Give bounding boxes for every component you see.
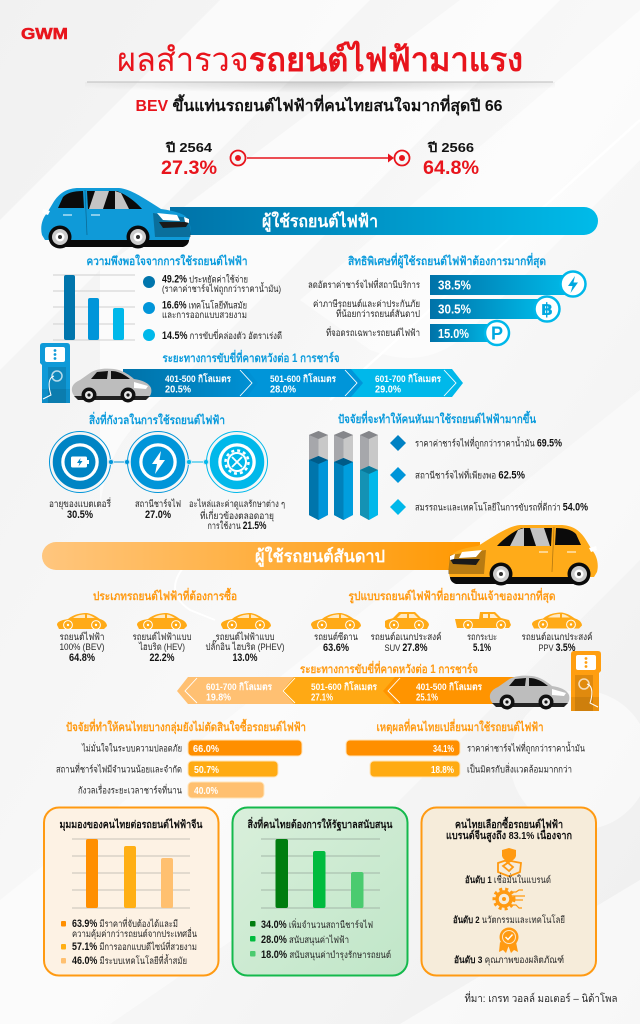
- legend: [250, 918, 391, 961]
- icon: parking: P: [491, 324, 503, 344]
- heading: desired body style: รูปแบบรถยนต์ไฟฟ้าที่อยากเป็นเจ้าของมากที่สุด: [348, 587, 556, 604]
- range arrows (blue): [123, 369, 463, 397]
- rank 2: อันดับ 2 นวัตกรรมและเทคโนโลยี: [453, 914, 565, 926]
- panel: government support: [232, 808, 408, 976]
- legend: satisfaction: 14.5% การขับขี่คล่องตัว อัตราเร่งดี: [162, 329, 282, 342]
- illustration: gray car: [72, 369, 151, 402]
- legend: 18.0% สนับสนุนค่าบำรุงรักษารถยนต์: [261, 949, 391, 961]
- bar chart: hesitation: [56, 740, 302, 798]
- item: BEV: 100% (BEV): [60, 642, 104, 653]
- legend: factors: ราคาค่าชาร์จไฟที่ถูกกว่าราคาน้ำมัน 69.5%: [415, 436, 562, 450]
- legend: satisfaction: (ราคาค่าชาร์จไฟถูกกว่าราคาน้ำมัน): [162, 282, 281, 295]
- privilege labels: ค่าภาษีรถยนต์และค่าประกันภัย: [313, 298, 420, 310]
- item: sedan: รถยนต์ซีดาน: [314, 631, 358, 643]
- item: SUV: รถยนต์อเนกประสงค์: [370, 631, 442, 643]
- item: BEV: 64.8%: [69, 652, 95, 664]
- privilege labels: ลดอัตราค่าชาร์จไฟที่สถานีบริการ: [308, 278, 420, 291]
- item: HEV: [132, 613, 192, 664]
- range arrows (orange): 27.1%: [311, 692, 333, 704]
- bar chart: hesitation: สถานที่ชาร์จไฟมีจำนวนน้อยและจำกัด: [56, 762, 182, 776]
- legend: 46.0% มีระบบเทคโนโลยีที่ล้ำสมัย: [72, 954, 187, 967]
- panel heading: มุมมองของคนไทยต่อรถยนต์ไฟฟ้าจีน: [60, 818, 203, 832]
- icon: medal: [499, 928, 518, 953]
- bar chart: [72, 839, 190, 908]
- source: ที่มา: เกรท วอลล์ มอเตอร์ – นิด้าโพล: [464, 991, 618, 1005]
- range arrows (orange): 601-700 กิโลเมตร: [206, 681, 273, 693]
- heading: range (orange): ระยะทางการขับขี่ที่คาดหวังต่อ 1 การชาร์จ: [300, 660, 478, 676]
- bar chart: [261, 839, 380, 908]
- item: BEV: รถยนต์ไฟฟ้า: [60, 631, 104, 643]
- legend: 28.0% สนับสนุนค่าไฟฟ้า: [261, 934, 349, 946]
- legend: 34.0% เพิ่มจำนวนสถานีชาร์จไฟ: [261, 918, 373, 931]
- heading: concerns: สิ่งที่กังวลในการใช้รถยนต์ไฟฟ้า: [89, 411, 225, 427]
- icon: parking: [485, 321, 509, 345]
- range arrows (blue): 601-700 กิโลเมตร: [375, 373, 442, 385]
- legend: satisfaction: 49.2% ประหยัดค่าใช้จ่าย: [162, 274, 248, 286]
- item: BEV: [57, 613, 107, 664]
- privilege labels: [308, 278, 420, 339]
- bar chart: hesitation: ไม่มั่นใจในระบบความปลอดภัย: [81, 742, 182, 754]
- item: PPV: PPV 3.5%: [538, 642, 576, 654]
- privilege labels: ที่น้อยกว่ารถยนต์สันดาป: [336, 307, 420, 320]
- icon: handshake: [498, 848, 521, 876]
- item: PPV: รถยนต์อเนกประสงค์: [522, 631, 592, 643]
- concern: charging station: สถานีชาร์จไฟ: [135, 498, 181, 510]
- range arrows (orange): 19.8%: [206, 692, 231, 704]
- second heading line: แบรนด์จีนสูงถึง 83.1% เนื่องจาก: [446, 827, 572, 843]
- heading: factors: ปัจจัยที่จะทำให้คนหันมาใช้รถยนต์ไฟฟ้ามากขึ้น: [338, 410, 536, 426]
- connector: [186, 460, 208, 464]
- connector: [108, 460, 130, 464]
- range arrows (blue): 501-600 กิโลเมตร: [270, 373, 337, 385]
- illustration: orange charger: [571, 651, 601, 711]
- bar chart: privileges: [430, 275, 573, 342]
- bar chart: reasons to switch: 18.8%: [431, 764, 455, 776]
- arrow: 2564 to 2566: [230, 150, 410, 166]
- bar chart: reasons to switch: 34.1%: [433, 743, 454, 755]
- bar chart: privileges: 38.5%: [438, 278, 471, 292]
- section banner: EV users: ผู้ใช้รถยนต์ไฟฟ้า: [262, 211, 378, 233]
- stat: 2566: [423, 141, 479, 179]
- illustration: gray car 2: [490, 676, 569, 710]
- item: HEV: รถยนต์ไฟฟ้าแบบ: [132, 631, 192, 643]
- legend: 63.9% มีราคาที่จับต้องได้และมี: [72, 917, 178, 930]
- rank 1: อันดับ 1 เชื่อมั่นในแบรนด์: [465, 873, 551, 886]
- 3D bar chart: factors: [309, 431, 378, 520]
- bar chart: reasons to switch: เป็นมิตรกับสิ่งแวดล้อมมากกว่า: [467, 762, 572, 776]
- range arrows (blue): 28.0%: [270, 384, 296, 396]
- bar chart: hesitation: 40.0%: [194, 785, 219, 797]
- legend: factors: [390, 435, 588, 515]
- heading: EV types: ประเภทรถยนต์ไฟฟ้าที่ต้องการซื้อ: [93, 587, 237, 603]
- item: sedan: 63.6%: [323, 642, 349, 654]
- legend: satisfaction: และการออกแบบสวยงาม: [162, 310, 247, 321]
- item: PHEV: [206, 613, 284, 664]
- concern: battery: 30.5%: [67, 509, 93, 521]
- section banner: ICE users: ผู้ใช้รถยนต์สันดาป: [255, 546, 385, 568]
- legend: satisfaction: 16.6% เทคโนโลยีทันสมัย: [162, 300, 247, 312]
- heading: privileges: สิทธิพิเศษที่ผู้ใช้รถยนต์ไฟฟ้าต้องการมากที่สุด: [348, 252, 546, 269]
- range arrows (blue): 29.0%: [375, 384, 401, 396]
- concern: charging station: [128, 432, 188, 521]
- icon: lightning: [560, 272, 586, 296]
- range arrows (orange): 401-500 กิโลเมตร: [416, 681, 483, 693]
- icon: baht: [534, 296, 560, 322]
- subtitle: BEV ขึ้นแท่นรถยนต์ไฟฟ้าที่คนไทยสนใจมากที่สุดปี 66: [136, 94, 503, 116]
- range arrows (blue): 20.5%: [165, 384, 191, 396]
- item: sedan: [311, 613, 361, 654]
- item: pickup: [455, 612, 511, 654]
- illustration: orange car: [448, 525, 598, 586]
- legend: satisfaction: [143, 274, 282, 342]
- bar chart: hesitation: 50.7%: [194, 764, 220, 776]
- bar chart: hesitation: 66.0%: [193, 743, 220, 755]
- bar chart: reasons to switch: [346, 740, 585, 777]
- range arrows (blue): 401-500 กิโลเมตร: [165, 373, 232, 385]
- title: ผลสำรวจรถยนต์ไฟฟ้ามาแรง: [117, 40, 523, 78]
- section banner: EV users: [170, 207, 598, 235]
- rank 3: อันดับ 3 คุณภาพของผลิตภัณฑ์: [454, 954, 564, 966]
- heading: satisfaction: ความพึงพอใจจากการใช้รถยนต์ไฟฟ้า: [86, 254, 248, 268]
- bar chart: satisfaction: [53, 275, 135, 340]
- legend: factors: สมรรถนะและเทคโนโลยีในการขับรถที่ดีกว่า 54.0%: [415, 500, 588, 514]
- item: PHEV: 13.0%: [232, 652, 258, 664]
- item: PHEV: ปลั๊กอิน ไฮบริด (PHEV): [206, 639, 284, 653]
- concern: maintenance: การใช้งาน 21.5%: [208, 520, 267, 532]
- range arrows (orange): [177, 677, 525, 704]
- concern: maintenance: ที่เกี่ยวข้องตลอดอายุ: [200, 509, 274, 522]
- stat: 2564: 27.3%: [161, 158, 217, 179]
- item: HEV: ไฮบริด (HEV): [138, 641, 185, 653]
- icon: baht: ฿: [541, 300, 553, 319]
- heading: hesitation: ปัจจัยที่ทำให้คนไทยบางกลุ่มยังไม่ตัดสินใจซื้อรถยนต์ไฟฟ้า: [66, 718, 306, 735]
- heading: reasons to switch: เหตุผลที่คนไทยเปลี่ยนมาใช้รถยนต์ไฟฟ้า: [376, 718, 544, 735]
- logo: GWM: GWM: [21, 26, 68, 43]
- item: PHEV: รถยนต์ไฟฟ้าแบบ: [216, 631, 274, 643]
- stat: 2566: 64.8%: [423, 158, 479, 179]
- item: pickup: รถกระบะ: [467, 632, 497, 643]
- stat: 2566: ปี 2566: [426, 141, 474, 155]
- concern: charging station: 27.0%: [145, 509, 171, 521]
- section banner: ICE users: [42, 542, 480, 570]
- legend: factors: สถานีชาร์จไฟที่เพียงพอ 62.5%: [415, 468, 525, 482]
- panel heading: คนไทยเลือกซื้อรถยนต์ไฟฟ้า: [455, 816, 563, 831]
- stat: 2564: ปี 2564: [164, 141, 212, 155]
- bar chart: hesitation: กังวลเรื่องระยะเวลาชาร์จที่นาน: [78, 784, 182, 796]
- item: pickup: 5.1%: [473, 642, 491, 654]
- privilege labels: ที่จอดรถเฉพาะรถยนต์ไฟฟ้า: [326, 326, 420, 339]
- bar chart: privileges: 15.0%: [438, 327, 469, 341]
- concern: maintenance: [189, 432, 285, 532]
- bar chart: privileges: 30.5%: [438, 302, 471, 316]
- concern: maintenance: อะไหล่และค่าดูแลรักษาต่าง ๆ: [189, 498, 285, 510]
- illustration: blue car: [41, 188, 191, 248]
- header divider: [85, 82, 555, 100]
- item: PPV: [522, 612, 592, 654]
- item: SUV: SUV 27.8%: [384, 642, 428, 654]
- range arrows (orange): 25.1%: [416, 692, 438, 704]
- concern: battery: [49, 432, 111, 521]
- panel: Thai view of Chinese EVs: [44, 808, 218, 976]
- legend: [61, 917, 197, 967]
- panel heading: สิ่งที่คนไทยต้องการให้รัฐบาลสนับสนุน: [247, 816, 393, 832]
- illustration: blue charger: [40, 343, 70, 403]
- legend: 57.1% มีการออกแบบดีไซน์ที่สวยงาม: [72, 940, 197, 953]
- panel: Chinese brand choice: [422, 808, 596, 976]
- item: HEV: 22.2%: [150, 652, 175, 664]
- legend: ความคุ้มค่ากว่ารถยนต์จากประเทศอื่น: [72, 927, 197, 940]
- heading: range (blue): ระยะทางการขับขี่ที่คาดหวังต่อ 1 การชาร์จ: [162, 349, 340, 365]
- item: SUV: [370, 612, 442, 654]
- range arrows (orange): 501-600 กิโลเมตร: [311, 681, 378, 693]
- concern: battery: อายุของแบตเตอรี่: [49, 497, 111, 510]
- icon: gear circuit: [494, 889, 525, 909]
- bar chart: reasons to switch: ราคาค่าชาร์จไฟที่ถูกกว่าราคาน้ำมัน: [467, 742, 585, 754]
- stat: 2564: [161, 141, 217, 179]
